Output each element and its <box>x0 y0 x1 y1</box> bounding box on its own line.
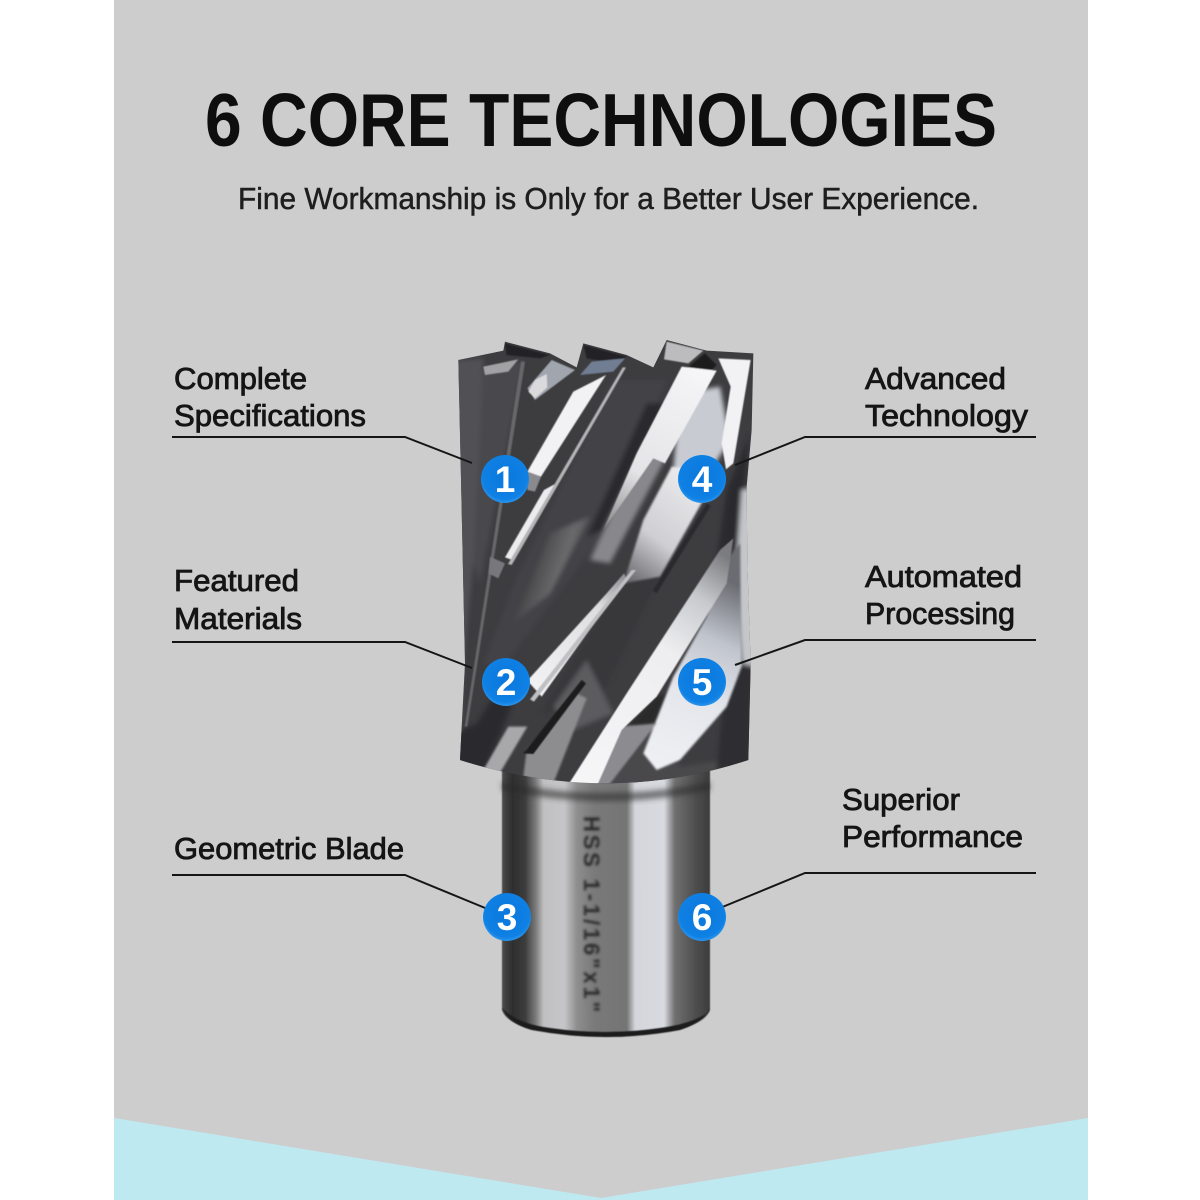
marker 1 <box>481 455 529 503</box>
label: Complete Specifications: Specifications <box>174 398 366 433</box>
label: Automated Processing: Automated <box>865 559 1022 594</box>
marker 3: 3 <box>497 897 517 938</box>
label: Complete Specifications <box>174 361 366 433</box>
marker 4 <box>678 455 726 503</box>
callout line 2 <box>172 642 472 668</box>
callout line 5 <box>735 640 1036 665</box>
cutter body with helical flutes <box>453 340 757 797</box>
marker 2 <box>482 658 530 706</box>
soft shading layer <box>453 358 757 797</box>
marker 6: 6 <box>692 897 712 938</box>
marker 2: 2 <box>496 662 516 703</box>
label: Advanced Technology <box>865 361 1029 433</box>
callout line 6 <box>720 873 1036 908</box>
label: Featured Materials: Materials <box>174 601 302 636</box>
callout line 1 <box>172 437 472 463</box>
callout line 4 <box>735 437 1036 465</box>
marker 6 <box>678 893 726 941</box>
crisp blade layer <box>465 342 751 788</box>
label: Advanced Technology: Advanced <box>865 361 1006 396</box>
label: Featured Materials: Featured <box>174 563 299 598</box>
label: Superior Performance: Superior <box>842 782 960 817</box>
callout line 3 <box>172 875 490 910</box>
label: Advanced Technology: Technology <box>865 398 1029 433</box>
marker 1: 1 <box>495 459 515 500</box>
label: Featured Materials <box>174 563 302 636</box>
product: annular cutter <box>453 340 757 1037</box>
subtitle: Fine Workmanship is Only for a Better User Experience. <box>238 181 979 216</box>
label: Complete Specifications: Complete <box>174 361 307 396</box>
marker 5: 5 <box>692 662 712 703</box>
bottom pale blue chevron <box>114 1118 1088 1200</box>
mid-detail layer <box>483 467 742 797</box>
marker 4: 4 <box>692 459 713 500</box>
marker 3 <box>483 893 531 941</box>
marker 5 <box>678 658 726 706</box>
label: Geometric Blade: Geometric Blade <box>174 831 404 866</box>
shank engraving: HSS 1-1/16"x1" <box>579 816 604 1012</box>
label: Automated Processing: Processing <box>865 596 1015 631</box>
title: 6 CORE TECHNOLOGIES <box>205 78 997 162</box>
label: Automated Processing <box>865 559 1022 631</box>
label: Superior Performance <box>842 782 1023 854</box>
label: Superior Performance: Performance <box>842 819 1023 854</box>
cutter shank <box>502 770 710 1037</box>
